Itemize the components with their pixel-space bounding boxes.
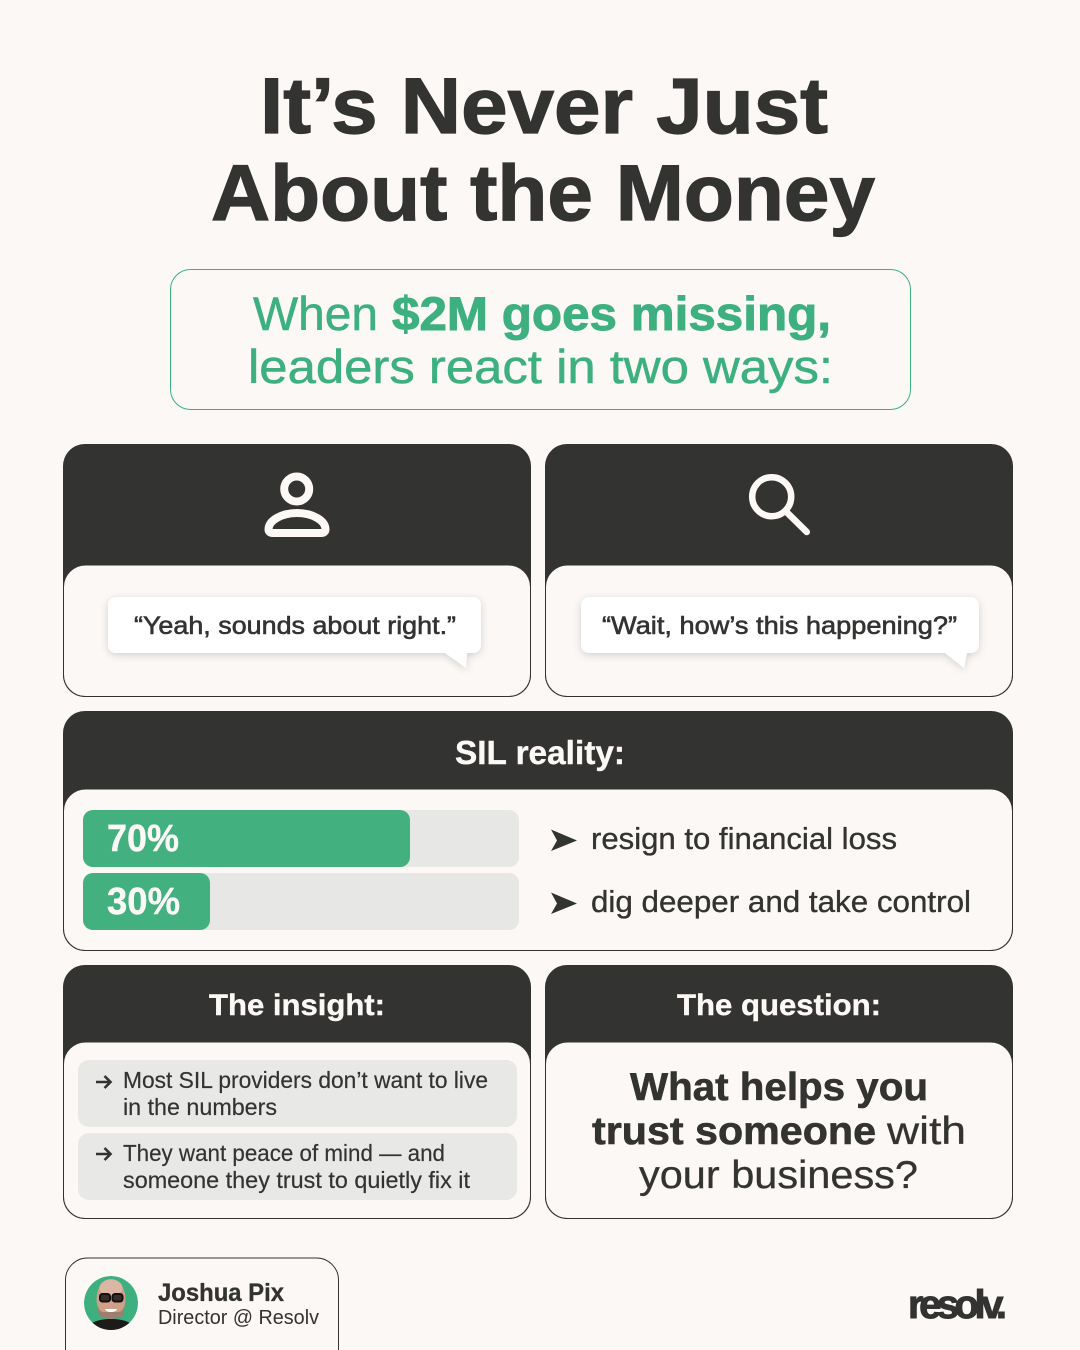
insight row 1: Most SIL providers don’t want to live: [123, 1067, 488, 1093]
logo: resolv: resolv.: [908, 1283, 1007, 1327]
panel: curious reaction: [545, 444, 1013, 697]
bar: 70 percent: 70%: [107, 818, 179, 860]
title: [211, 61, 875, 237]
bar: 30 percent: [83, 873, 519, 930]
insight row 1: in the numbers: [123, 1094, 277, 1120]
subtitle callout: When: [253, 287, 378, 340]
insight row 2: They want peace of mind — and: [123, 1140, 445, 1166]
heading: SIL reality: SIL reality:: [455, 734, 625, 771]
question text: [592, 1066, 966, 1197]
icon: person: [268, 476, 326, 533]
question text: with: [886, 1110, 966, 1153]
insight row 2: [78, 1133, 517, 1200]
bar: 70 percent: [83, 810, 519, 867]
subtitle callout: $2M goes missing,: [392, 287, 831, 340]
label: resign: resign to financial loss: [591, 821, 897, 856]
speech bubble: yeah: [108, 597, 481, 668]
question text: trust someone: [592, 1110, 876, 1153]
speech bubble: yeah: “Yeah, sounds about right.”: [134, 612, 456, 640]
speech bubble: wait: “Wait, how’s this happening?”: [602, 612, 957, 640]
panel: resigned reaction: [63, 444, 531, 697]
heading: the question: The question:: [677, 989, 881, 1022]
panel: the question: [545, 965, 1013, 1219]
heading: the insight: The insight:: [209, 989, 385, 1022]
insight row 2: someone they trust to quietly fix it: [123, 1167, 470, 1193]
arrow: dig deeper: [551, 892, 577, 914]
title: It’s Never Just: [260, 61, 828, 150]
title: About the Money: [211, 148, 875, 237]
subtitle callout: leaders react in two ways:: [248, 340, 833, 393]
author name: Joshua Pix: [158, 1279, 284, 1307]
arrow: resign: [551, 830, 577, 851]
avatar: [84, 1276, 138, 1332]
bar: 30 percent: 30%: [107, 881, 180, 923]
insight row 1: [78, 1060, 517, 1127]
speech bubble: wait: [581, 597, 979, 668]
panel: SIL reality: [63, 711, 1013, 951]
icon: magnifying glass: [752, 477, 807, 532]
author role: Director @ Resolv: [158, 1306, 320, 1329]
question text: What helps you: [630, 1066, 928, 1109]
panel: the insight: [63, 965, 531, 1219]
subtitle callout: [170, 270, 910, 410]
question text: your business?: [639, 1154, 918, 1197]
author card: [66, 1258, 338, 1350]
label: dig deeper: dig deeper and take control: [591, 884, 971, 919]
